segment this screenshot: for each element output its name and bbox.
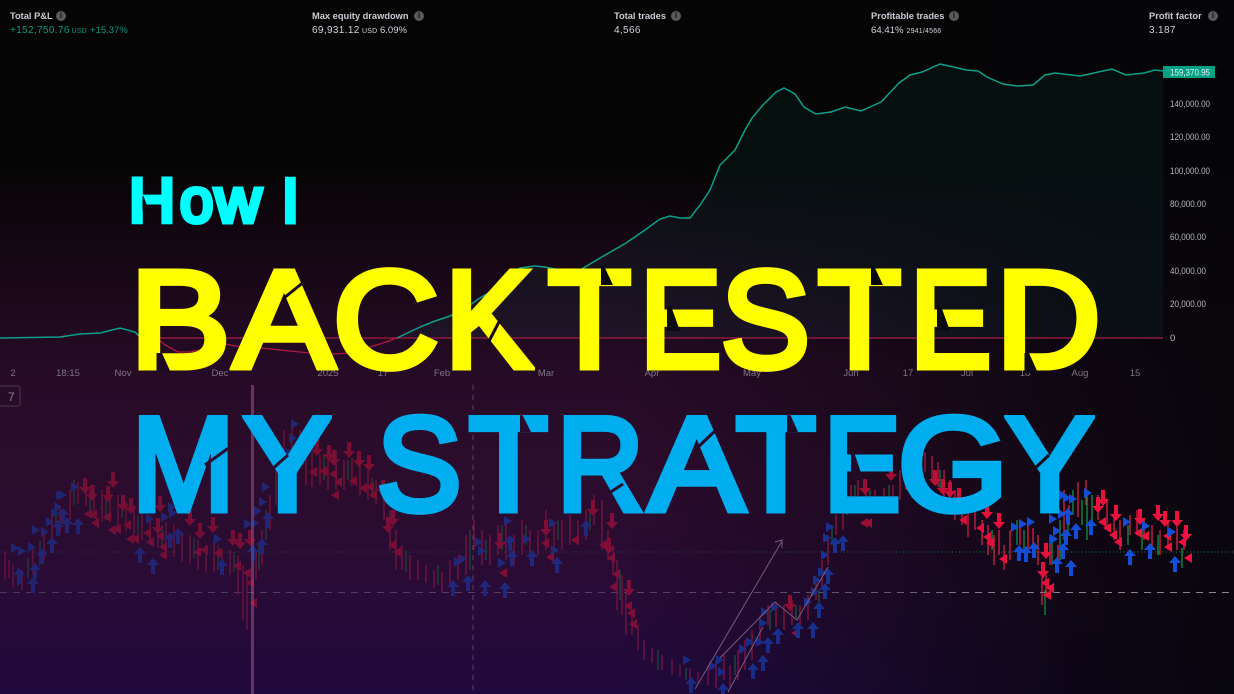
equity line (0, 64, 1163, 338)
title line: MY STRATEGY: M (132, 391, 234, 539)
title line: MY STRATEGY: A (649, 391, 744, 539)
stat: profit factor: Profit factor (1149, 11, 1202, 21)
current value tag: 159,370.95 (1170, 68, 1210, 78)
drawn trend arrows (695, 540, 828, 692)
title line: MY STRATEGY: E (824, 391, 900, 539)
equity area fill (397, 64, 1163, 338)
x axis labels (10, 368, 1140, 379)
x axis labels: 17 (903, 368, 913, 379)
title line: MY STRATEGY: T (736, 391, 816, 539)
y axis labels (1170, 99, 1210, 344)
stat: total P&L: USD (72, 28, 87, 35)
stat: profitable trades: i (953, 11, 955, 20)
title line: MY STRATEGY: T (469, 391, 548, 539)
stat: total P&L: i (60, 11, 62, 20)
stats header (10, 11, 1218, 36)
y axis labels: 20,000.00 (1170, 299, 1206, 310)
stat: total trades (614, 11, 681, 36)
x axis labels: Jul (961, 368, 973, 379)
stat: max equity drawdown: 6.09% (380, 25, 407, 36)
x axis labels: Aug (1072, 368, 1088, 379)
stat: max equity drawdown: i (418, 11, 420, 20)
price chart (0, 385, 1233, 694)
equity chart (0, 63, 1215, 379)
candles and signals (0, 385, 1234, 694)
title line: BACKTESTED: S (721, 243, 810, 397)
x axis labels: Nov (115, 368, 132, 379)
title line: MY STRATEGY: Y (244, 391, 331, 539)
stat: total trades: i (675, 11, 677, 20)
title line: MY STRATEGY: R (557, 391, 643, 539)
title line: How I: H (129, 167, 176, 236)
stat: total P&L: Total P&L (10, 11, 53, 21)
title line: BACKTESTED: T (818, 243, 901, 397)
candles (5, 425, 1184, 688)
session marker bar (251, 385, 254, 694)
stat: max equity drawdown: USD (362, 28, 377, 35)
stat: total trades: 4,566 (614, 25, 641, 36)
y axis labels: 60,000.00 (1170, 232, 1206, 243)
stat: profitable trades (871, 11, 959, 36)
x axis labels: Dec (212, 368, 229, 379)
stat: profitable trades: 2941/4566 (906, 28, 941, 35)
stat: total P&L (10, 11, 128, 36)
stat: profit factor (1149, 11, 1218, 36)
title line: BACKTESTED: K (445, 243, 532, 397)
title line: BACKTESTED: A (234, 243, 334, 397)
stat: max equity drawdown (312, 11, 424, 36)
title line: How I (129, 167, 299, 236)
title line: BACKTESTED: C (333, 243, 439, 397)
zero baseline (140, 337, 1163, 339)
title line: BACKTESTED: B (130, 243, 230, 397)
stat: total P&L: +15.37% (90, 25, 128, 36)
title line: How I: I (282, 167, 299, 236)
x axis labels: Feb (434, 368, 450, 379)
x axis labels: 17 (378, 368, 388, 379)
y axis labels: 100,000.00 (1170, 166, 1210, 177)
title line: How I: o (180, 167, 213, 236)
title line: BACKTESTED: T (548, 243, 631, 397)
stat: max equity drawdown: 69,931.12 (312, 25, 360, 36)
title line: BACKTESTED (130, 243, 1100, 397)
x axis labels: Jun (843, 368, 859, 379)
indicator count tag: 7 (8, 390, 15, 404)
left signals (84, 466, 1192, 638)
stat: profitable trades: Profitable trades (871, 11, 944, 21)
title line: MY STRATEGY: G (898, 391, 1008, 539)
right signals (11, 419, 1176, 677)
stat: max equity drawdown: Max equity drawdown (312, 11, 409, 21)
y axis labels: 40,000.00 (1170, 266, 1206, 277)
x axis labels: 18 (1020, 368, 1030, 379)
down arrows (79, 440, 1192, 611)
drawdown line (140, 337, 397, 354)
title line: How I: w (215, 167, 262, 236)
y axis labels: 140,000.00 (1170, 99, 1210, 110)
x axis labels: 2 (10, 368, 16, 379)
title line: MY STRATEGY: Y (1006, 391, 1094, 539)
y axis labels: 120,000.00 (1170, 132, 1210, 143)
title line: MY STRATEGY (132, 391, 1095, 539)
title line: MY STRATEGY: S (377, 391, 461, 539)
price level lines (0, 385, 1234, 694)
x axis labels: May (743, 368, 761, 379)
stat: profitable trades: 64.41% (871, 25, 904, 36)
x axis labels: Apr (645, 368, 659, 379)
stat: total P&L: +152,750.76 (10, 25, 70, 36)
x axis labels: 18:15 (56, 368, 80, 379)
x axis labels: Mar (538, 368, 554, 379)
stat: profit factor: 3.187 (1149, 25, 1176, 36)
title line: BACKTESTED: E (910, 243, 991, 397)
title line: BACKTESTED: D (996, 243, 1100, 397)
x axis labels: 15 (1130, 368, 1140, 379)
stat: profit factor: i (1212, 11, 1214, 20)
x axis labels: 2025 (317, 368, 339, 379)
stat: total trades: Total trades (614, 11, 666, 21)
indicator count tag (0, 386, 20, 406)
title line: BACKTESTED: E (640, 243, 721, 397)
y axis labels: 80,000.00 (1170, 199, 1206, 210)
up arrows (13, 477, 1181, 694)
y axis labels: 0 (1170, 333, 1175, 344)
